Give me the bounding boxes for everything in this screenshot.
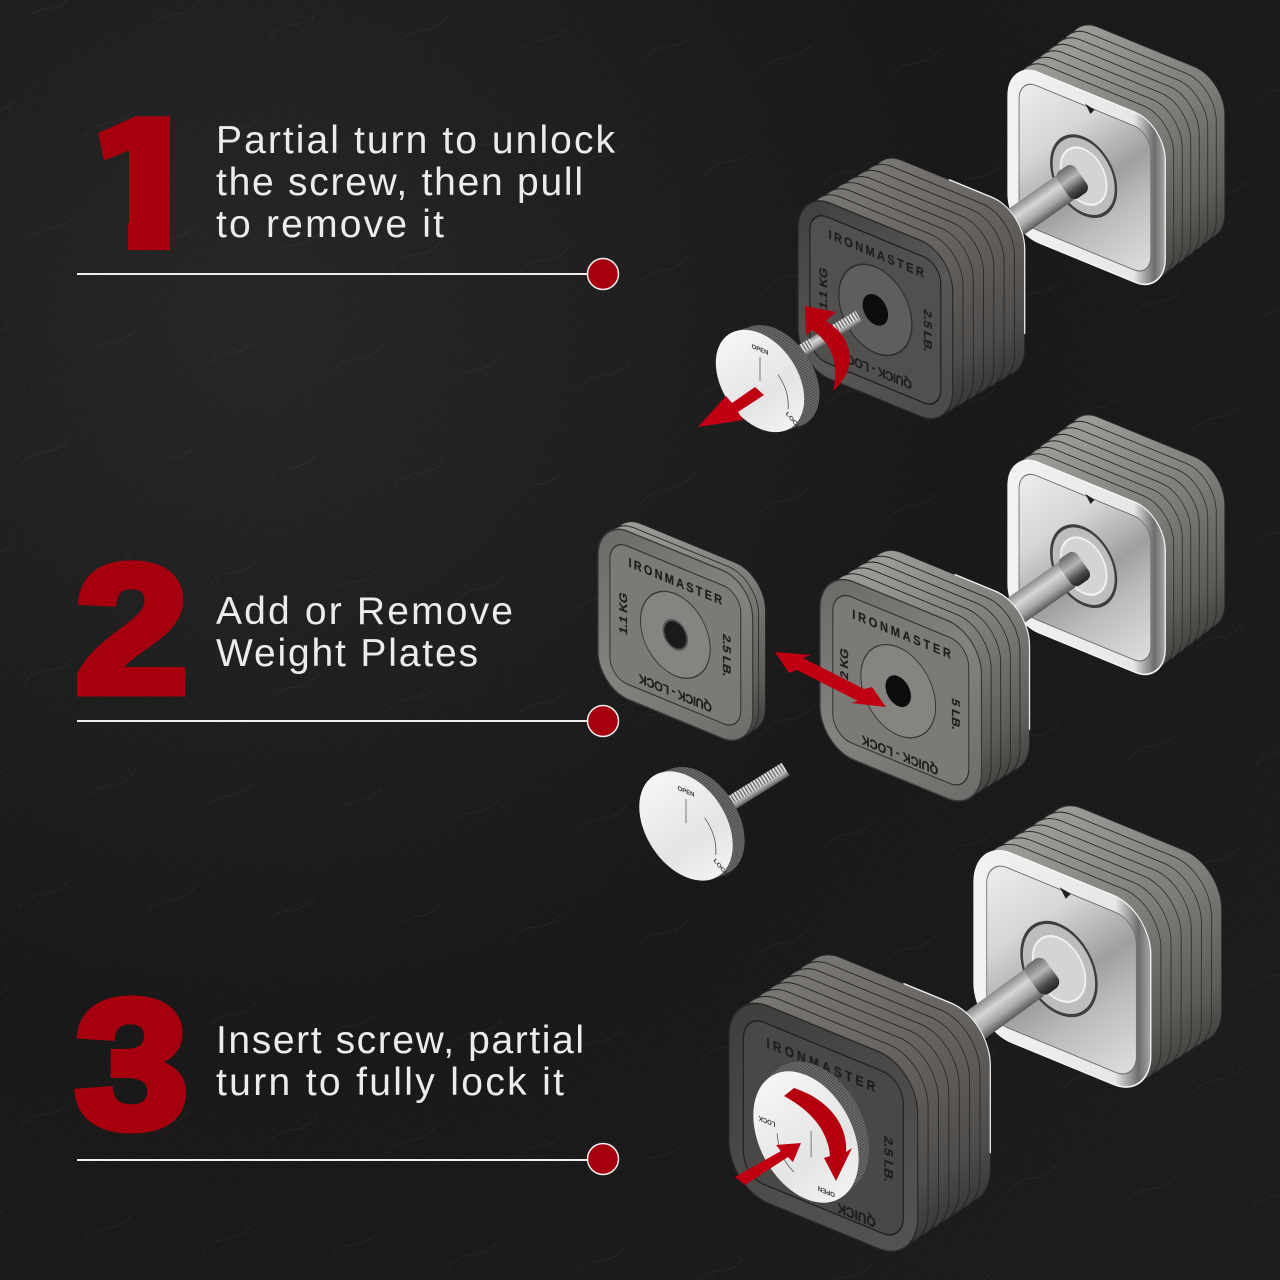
arrow: add or remove plate — [775, 652, 886, 707]
screw: step 2: OPEN — [678, 785, 695, 799]
step 3 instructions — [216, 1019, 584, 1104]
step 2 divider with dot — [77, 706, 618, 736]
dumbbell: step 1 — [798, 0, 1225, 459]
near weight block — [798, 118, 1025, 459]
plate lettering: 5 LB. — [949, 696, 961, 733]
step 3 number: 3 — [75, 962, 188, 1166]
screw: step 1 — [716, 304, 862, 453]
step 1 instructions: to remove it — [216, 203, 444, 246]
arrow: insert screw — [735, 1143, 801, 1185]
step 1 instructions — [216, 119, 616, 246]
step 3 divider with dot — [77, 1144, 618, 1174]
plate lettering — [838, 601, 961, 788]
screw: step 1: LOCK — [784, 411, 802, 431]
plate lettering: 2.5 LB. — [882, 1134, 895, 1185]
step 1 instructions: Partial turn to unlock — [216, 119, 616, 162]
screw: step 1: OPEN — [752, 343, 769, 357]
plate lettering: QUICK — [837, 1199, 876, 1231]
plate lettering: IRONMASTER — [629, 555, 722, 608]
dumbbell: step 3 — [729, 764, 1222, 1280]
step 1 divider with dot — [77, 258, 618, 290]
near weight block — [820, 519, 1030, 832]
plate lettering: QUICK - LOCK — [839, 348, 912, 392]
loose weight plate — [598, 506, 765, 756]
step 2 instructions: Weight Plates — [216, 632, 478, 675]
near weight block — [729, 912, 990, 1280]
plate lettering — [817, 222, 934, 401]
step 3 instructions: turn to fully lock it — [216, 1061, 564, 1104]
plate lettering: 2.2 KG — [838, 646, 851, 692]
step 2 number: 2 — [75, 527, 188, 731]
plate lettering: 1.1 KG — [617, 590, 630, 637]
handle bar — [1001, 162, 1091, 239]
step 1 instructions: the screw, then pull — [216, 161, 583, 204]
screw: step 3 — [753, 1039, 869, 1225]
plate lettering: 2.5 LB. — [921, 307, 934, 355]
arrow: pull screw out — [698, 387, 764, 427]
step 1 number: 1 — [74, 82, 221, 285]
plate lettering: 1.1 KG — [817, 265, 830, 312]
far weight block — [974, 764, 1222, 1129]
dumbbell: step 2 — [820, 380, 1225, 832]
plate lettering — [766, 1035, 895, 1239]
plate lettering — [617, 550, 733, 724]
screw: step 3: OPEN — [818, 1184, 835, 1198]
screw: step 2 — [639, 746, 790, 901]
plate lettering: IRONMASTER — [766, 1035, 875, 1095]
plate lettering: IRONMASTER — [852, 607, 951, 662]
screw: step 2: LOCK — [712, 858, 730, 878]
plate lettering: 2.5 LB. — [720, 632, 733, 680]
plate lettering: QUICK - LOCK — [639, 671, 712, 715]
handle bar — [962, 955, 1062, 1041]
plate lettering: IRONMASTER — [829, 227, 924, 281]
plate lettering: QUICK - LOCK — [862, 732, 938, 778]
handle bar — [1003, 549, 1093, 626]
arrow: rotate to unlock — [805, 306, 850, 391]
step 2 instructions — [216, 590, 513, 675]
step 3 instructions: Insert screw, partial — [216, 1019, 584, 1062]
far weight block — [1008, 380, 1225, 709]
arrow: turn to lock — [784, 1088, 852, 1181]
step 2 instructions: Add or Remove — [216, 590, 513, 633]
screw: step 3: LOCK — [758, 1113, 775, 1128]
far weight block — [1008, 0, 1225, 319]
